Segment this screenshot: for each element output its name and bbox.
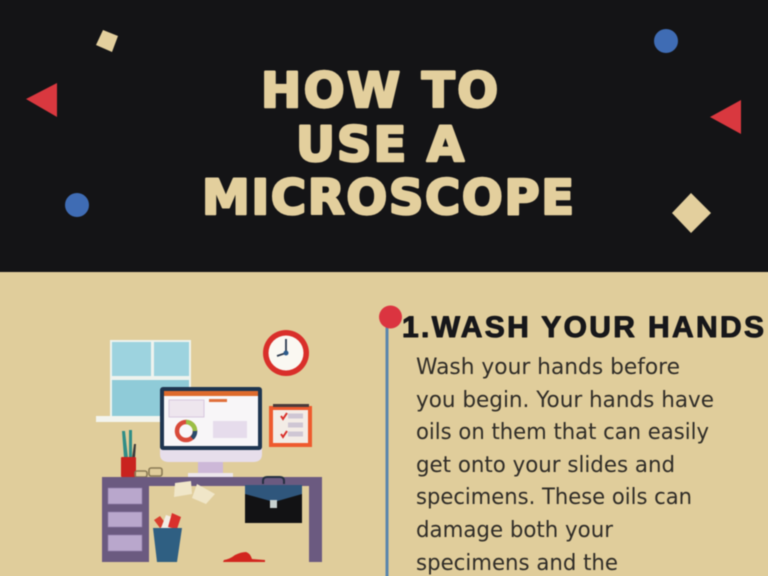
briefcase (245, 477, 302, 523)
timeline line (386, 318, 388, 576)
slippers (223, 552, 265, 562)
desk (102, 477, 322, 562)
step 1 text block: specimens and the (416, 551, 618, 576)
icon: red triangle left (26, 83, 57, 117)
icon: cream diamond right (672, 193, 711, 233)
wall clock (263, 330, 309, 376)
sticky notes (174, 481, 215, 504)
timeline red dot (379, 306, 402, 328)
body background panel (0, 272, 768, 576)
step 1 text block: you begin. Your hands have (416, 388, 714, 413)
desk drawers (108, 488, 142, 551)
pen cup (121, 430, 136, 477)
icon: blue circle left (65, 193, 89, 217)
step 1 text block: get onto your slides and (416, 453, 675, 478)
heading: step 1: 1.WASH YOUR HANDS (402, 311, 764, 344)
icon: cream diamond top left (96, 30, 118, 52)
illustration: office desk (96, 330, 322, 562)
step 1 text block: damage both your (416, 518, 614, 543)
step 1 text block: specimens. These oils can (416, 485, 692, 510)
header background panel (0, 0, 768, 272)
wall calendar (269, 404, 312, 447)
step 1 text block: Wash your hands before (416, 355, 680, 380)
title: HOW TO (261, 63, 498, 119)
waste bin (153, 513, 182, 562)
step 1 text block: oils on them that can easily (416, 420, 709, 445)
title: MICROSCOPE (202, 170, 574, 226)
window (96, 340, 191, 422)
title (202, 63, 574, 226)
icon: red triangle right (710, 100, 741, 134)
computer monitor (160, 387, 262, 477)
step 1 text block (416, 355, 714, 576)
glasses (135, 468, 162, 477)
icon: blue circle right (654, 29, 678, 53)
title: USE A (296, 117, 464, 173)
